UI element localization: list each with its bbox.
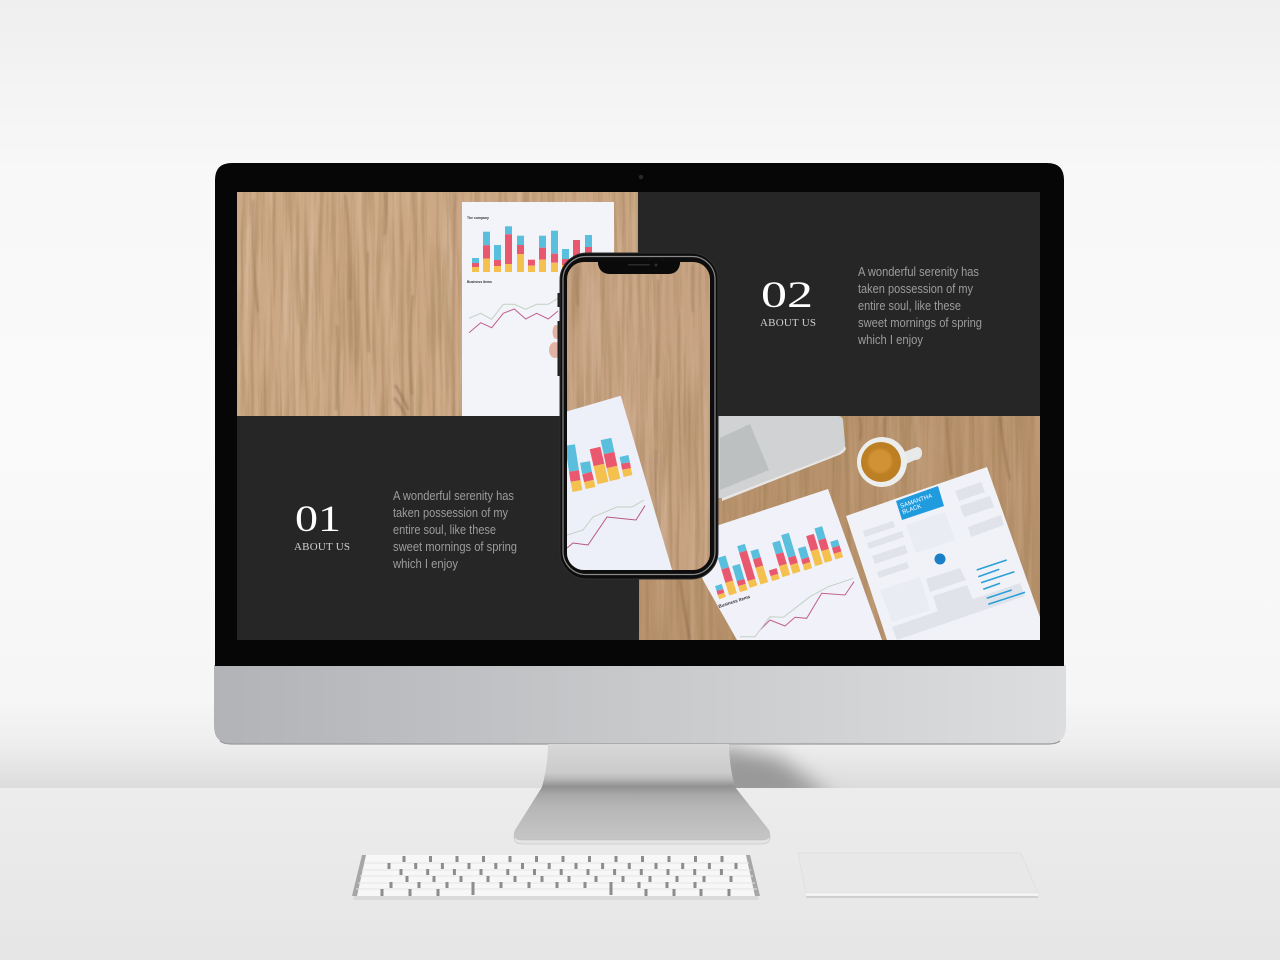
phone body: [560, 253, 718, 579]
bar chart: [718, 527, 839, 598]
paragraph: which I enjoy: [857, 333, 924, 347]
background: wall and desk: [0, 137, 1280, 788]
wood grain lines: [253, 192, 456, 416]
monitor: [214, 163, 1066, 744]
screen background: [237, 192, 1040, 640]
panel: about us 02: [760, 265, 982, 347]
side buttons: [558, 293, 560, 376]
panel: bottom-right photo: [639, 416, 1040, 640]
document: chart page: Business Items: [718, 594, 751, 609]
phone notch: [598, 261, 680, 274]
document with charts: [462, 202, 614, 416]
paragraph: sweet mornings of spring: [858, 316, 982, 330]
resume name block: [896, 486, 944, 520]
line chart: [469, 298, 558, 333]
document on phone: [567, 396, 672, 570]
document with charts: The company: [467, 216, 489, 220]
document: resume page: [846, 467, 1040, 640]
paragraph: entire soul, like these: [858, 299, 961, 313]
monitor stand: [514, 744, 770, 844]
paragraph: [392, 489, 517, 571]
number 01: 01: [295, 499, 341, 540]
panel: about us 01: [294, 489, 517, 571]
panel: top-left photo: [237, 192, 638, 416]
smartphone: [558, 252, 718, 580]
camera: [639, 175, 643, 179]
line chart: [740, 578, 854, 637]
phone line chart: [567, 500, 645, 548]
document with charts: Business Items: [467, 280, 492, 284]
paragraph: taken possession of my: [858, 282, 974, 296]
resume name block: BLACK: [902, 504, 922, 516]
coffee cup: [857, 437, 922, 487]
resume icon: [934, 554, 946, 564]
resume text blocks: [863, 482, 1025, 640]
phone screen: [567, 262, 710, 570]
hand: [549, 325, 558, 358]
skill bars: [977, 560, 1025, 604]
resume name block: SAMANTHA: [900, 493, 933, 510]
wood grain lines: [578, 265, 693, 540]
keyboard: [352, 855, 760, 900]
laptop: [718, 416, 846, 501]
label about us: ABOUT US: [760, 317, 816, 329]
paragraph: which I enjoy: [392, 557, 459, 571]
monitor bezel: [215, 163, 1064, 666]
paragraph: entire soul, like these: [393, 523, 496, 537]
paragraph: A wonderful serenity has: [858, 265, 979, 279]
wood grain lines: [680, 417, 1010, 640]
paragraph: taken possession of my: [393, 506, 509, 520]
trackpad: [798, 853, 1038, 898]
paragraph: A wonderful serenity has: [393, 489, 514, 503]
document: chart page: [690, 489, 882, 640]
phone speaker and camera: [628, 264, 658, 266]
monitor chin: [214, 665, 1066, 744]
number 02: 02: [761, 275, 813, 316]
paragraph: sweet mornings of spring: [393, 540, 517, 554]
bar chart: [472, 226, 592, 272]
label about us: ABOUT US: [294, 541, 350, 553]
paragraph: [857, 265, 982, 347]
phone bar chart: [570, 439, 628, 491]
